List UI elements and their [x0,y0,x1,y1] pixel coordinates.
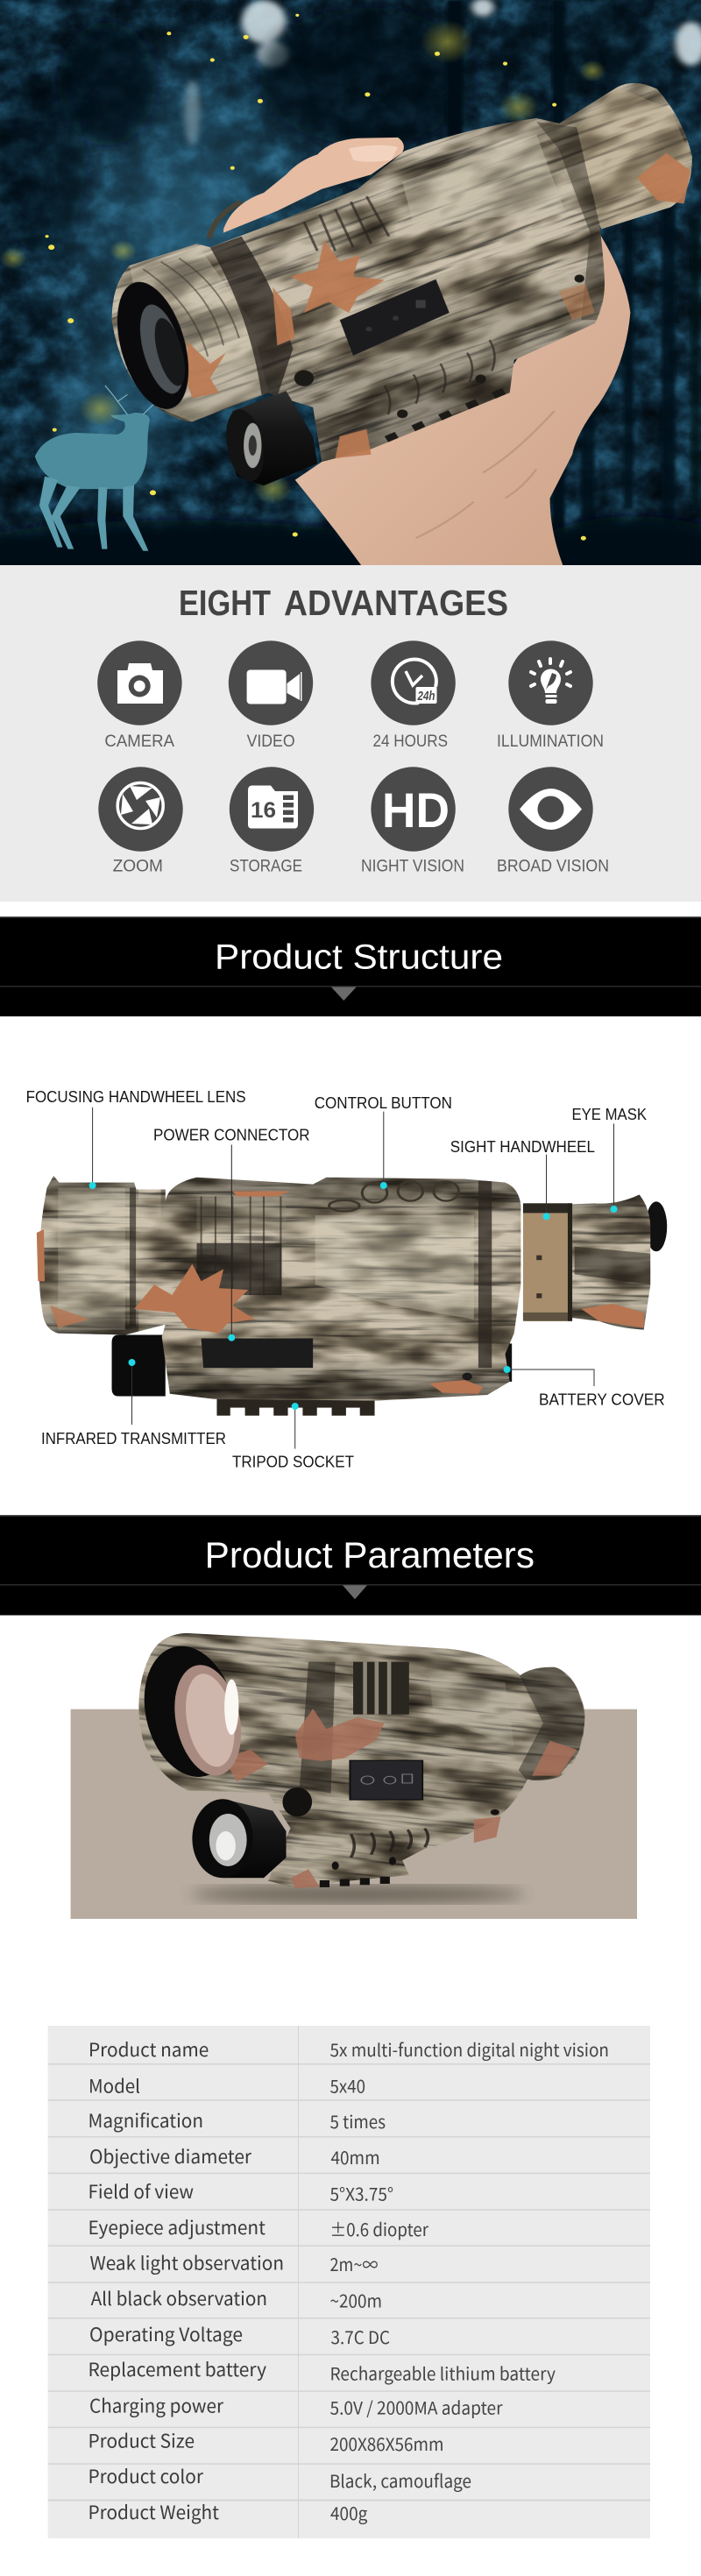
panel: eight advantages [0,565,701,902]
forest light glow [40,34,345,419]
row: weak light observation: Weak light observation [89,2250,284,2276]
row: model: Model [89,2073,140,2099]
vent grooves [202,1196,280,1295]
grip ribs [385,340,494,414]
row: product color [88,2463,471,2493]
dark barrel collar [210,237,293,396]
heading: eight advantages [179,583,508,623]
label: night vision: NIGHT VISION [361,857,464,876]
callout: infrared transmitter [41,1359,226,1447]
row: product name [89,2036,609,2063]
panel: product parameters table [48,2026,650,2538]
label: 24 hours: 24 HOURS [373,732,448,751]
row: product weight: Product Weight [88,2499,219,2525]
icon: illumination [508,640,593,725]
row: product weight [88,2499,367,2525]
objective lens [117,282,189,409]
row: magnification: 5 times [329,2108,386,2134]
rail grooves [294,274,584,442]
leaves [223,1709,577,1888]
hero photo: monocular held in hand in a night forest [0,0,701,863]
section banner: product parameters [0,1515,701,1616]
arrow: banner pointer [343,1585,367,1599]
row: operating voltage: Operating Voltage [89,2321,243,2347]
black port panel [202,1339,313,1368]
ground shadow [191,1886,524,1903]
callout: sight handwheel: SIGHT HANDWHEEL [450,1138,595,1156]
icon: video [229,640,313,725]
callout: sight handwheel [450,1138,595,1220]
heading: eight advantages: EIGHT [179,583,271,623]
row: eyepiece adjustment [88,2214,428,2241]
leaves on body [186,152,690,458]
icon: camera [97,640,182,725]
autumn leaves [37,1192,644,1394]
icon: broad vision eye [508,767,593,852]
row: product size: 200X86X56mm [329,2431,443,2456]
icon: storage card: 16 [251,798,276,823]
black control panel [340,280,450,356]
row: magnification: Magnification [88,2107,203,2134]
row: eyepiece adjustment: ±0.6 diopter [329,2216,428,2241]
camouflage shell [138,1633,585,1886]
row: field of view: 5°X3.75° [329,2180,393,2206]
icon: hd night vision: HD [382,782,450,838]
tree silhouettes [0,0,701,614]
label: illumination: ILLUMINATION [497,732,604,751]
row: all black observation [91,2285,382,2313]
icon: storage card [230,767,314,852]
eyepiece light [577,88,690,229]
callout: power connector: POWER CONNECTOR [153,1126,310,1143]
control panel [350,1760,422,1800]
callout: power connector [153,1126,310,1341]
callout: infrared transmitter: INFRARED TRANSMITTER [41,1430,226,1447]
top plate [402,135,564,225]
product photo on beige panel [71,1610,637,1919]
row: charging power [89,2392,503,2420]
row: objective diameter: Objective diameter [89,2143,252,2169]
collar strip [536,122,605,320]
vents on top [304,196,389,251]
row: product weight: 400g [330,2500,367,2525]
callout: control button: CONTROL BUTTON [315,1094,452,1112]
row: replacement battery: Replacement battery [88,2356,266,2382]
control buttons [329,1181,458,1211]
grip ribs [351,1829,428,1858]
barrel rings [143,258,239,357]
row: model: 5x40 [329,2073,365,2098]
callout: tripod socket [232,1403,354,1470]
callout: focusing handwheel lens: FOCUSING HANDWHEEL LENS [26,1088,246,1106]
row: eyepiece adjustment: Eyepiece adjustment [88,2214,266,2240]
row: field of view [88,2178,393,2206]
callout: control button [315,1094,452,1189]
row: charging power: Charging power [89,2392,224,2418]
row: operating voltage [89,2321,390,2349]
icon: zoom aperture [98,767,183,852]
infrared sensor and holes [282,1787,499,1887]
icon: 24 hours [371,640,456,725]
row: operating voltage: 3.7C DC [331,2324,390,2349]
row: replacement battery: Rechargeable lithium battery [329,2360,556,2385]
label: broad vision: BROAD VISION [497,857,609,876]
infrared transmitter [112,1335,166,1397]
row: product size: Product Size [88,2427,195,2453]
icon: 24 hours: 24h [417,689,435,704]
sight handwheel [523,1203,572,1321]
callout: eye mask [571,1106,647,1213]
hand behind the device [209,138,630,567]
row: field of view: Field of view [88,2178,194,2204]
label: camera: CAMERA [104,732,174,751]
label: video: VIDEO [247,732,295,751]
callout: battery cover [504,1366,665,1409]
deer [35,386,166,551]
row: replacement battery [88,2356,556,2385]
row: all black observation: ~200m [329,2287,382,2313]
row: magnification [88,2107,386,2134]
row: charging power: 5.0V / 2000MA adapter [329,2395,503,2420]
arrow: banner pointer [331,987,357,1001]
row: product name: Product name [89,2036,209,2063]
beige backdrop [71,1709,637,1919]
row: weak light observation [89,2250,379,2276]
torch / infrared lamp [221,391,317,485]
row: model [89,2073,365,2099]
callout: eye mask: EYE MASK [571,1106,647,1123]
heading: product structure: Product Structure [215,938,503,976]
row: objective diameter [89,2143,380,2169]
battery cover [500,1343,512,1382]
callout: tripod socket: TRIPOD SOCKET [232,1453,354,1470]
sky gaps between the trees [184,0,701,145]
label: storage: STORAGE [230,857,302,876]
screw hole [463,1373,472,1380]
row: objective diameter: 40mm [331,2144,380,2169]
row: product color: Product color [88,2463,204,2489]
row: all black observation: All black observation [91,2285,267,2311]
row: product color: Black, camouflage [329,2467,471,2493]
row: weak light observation: 2m~∞ [329,2251,379,2276]
vents [353,1662,409,1715]
camouflage body [112,82,692,462]
row: product name: 5x multi-function digital night vision [329,2036,609,2062]
callout: focusing handwheel lens [26,1088,246,1189]
row: product size [88,2427,443,2456]
eye cup [646,1201,667,1251]
heading: product parameters: Product Parameters [205,1534,535,1575]
heading: eight advantages: ADVANTAGES [284,583,508,623]
monocular side view [37,1176,668,1416]
icon: hd night vision [371,767,456,852]
objective lens [135,1643,249,1780]
objective barrel highlight [130,244,268,421]
section banner: product structure [0,916,701,1016]
fireflies [46,14,586,541]
tripod rail [216,1398,375,1416]
diagram: product structure [27,1091,668,1467]
torch [192,1799,287,1878]
table grid lines [48,2026,650,2538]
label: zoom: ZOOM [113,857,163,876]
camouflage shell [39,1176,650,1401]
callout: battery cover: BATTERY COVER [539,1391,665,1409]
